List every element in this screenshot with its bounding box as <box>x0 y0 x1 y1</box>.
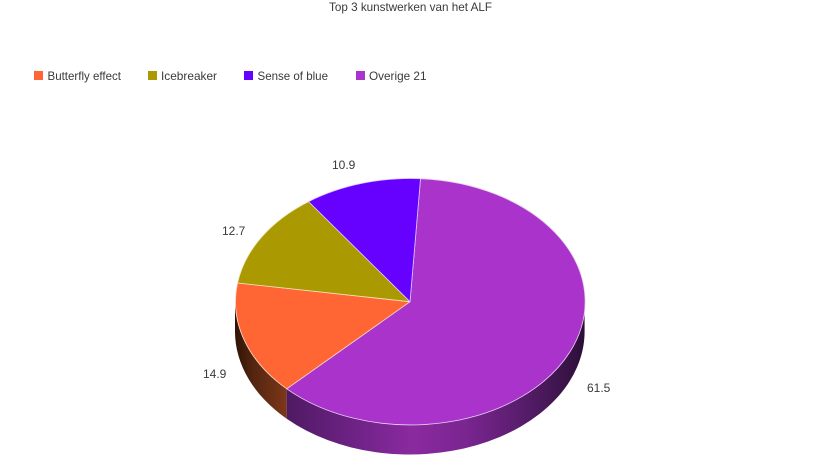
slice: Icebreaker <box>238 202 410 302</box>
slice: Sense of blue <box>309 178 420 302</box>
value label: 10.9: 10.9 <box>332 158 356 172</box>
slice: Butterfly effect <box>236 283 410 389</box>
value label: 61.5: 61.5 <box>587 381 611 395</box>
legend item: Icebreaker: Icebreaker <box>161 69 217 83</box>
pie side: Butterfly effect <box>235 302 287 419</box>
slice: Overige 21 <box>287 179 585 425</box>
value label: 12.7: 12.7 <box>222 224 246 238</box>
3D pie <box>235 178 585 455</box>
title: Top 3 kunstwerken van het ALF <box>329 0 492 14</box>
legend <box>34 69 427 83</box>
legend item: Butterfly effect: Butterfly effect <box>48 69 122 83</box>
legend item: Sense of blue: Sense of blue <box>258 69 328 83</box>
value label: 14.9: 14.9 <box>203 367 227 381</box>
pie side: Overige 21 <box>287 302 585 455</box>
legend item: Overige 21: Overige 21 <box>369 69 427 83</box>
